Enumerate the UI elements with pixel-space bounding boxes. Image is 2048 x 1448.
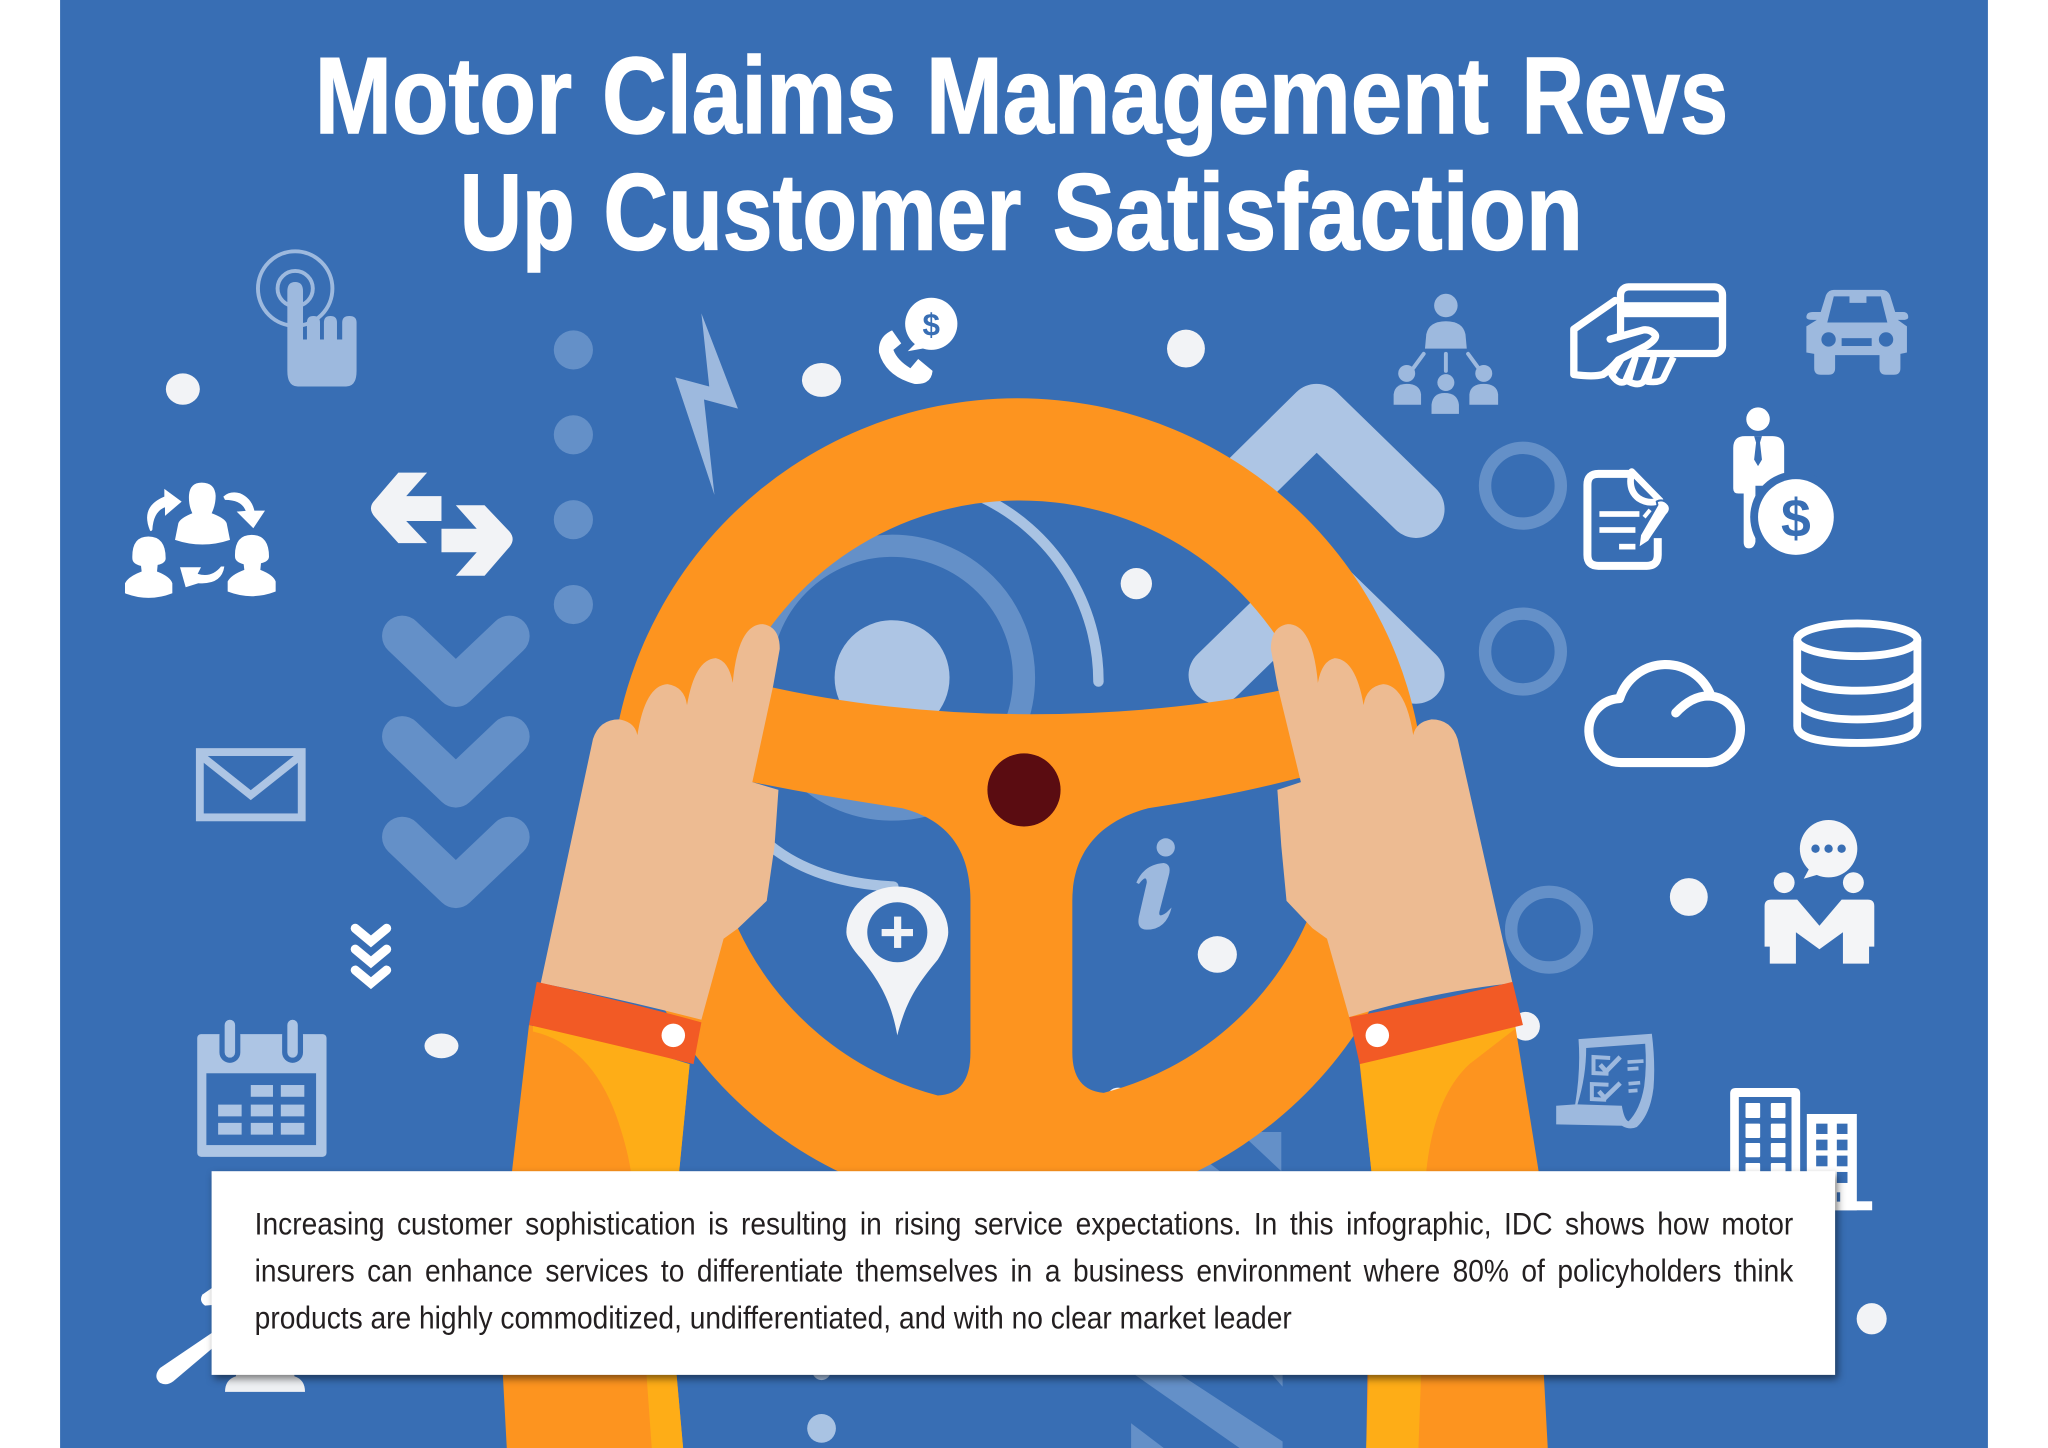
lightning bolt — [675, 313, 738, 495]
intro paragraph: products are highly commoditized, undifferentiated, and with no clear market leader — [255, 1301, 1292, 1336]
icon: envelope — [200, 752, 302, 817]
icon: small triple chevrons — [355, 928, 387, 983]
large up chevrons — [1216, 413, 1416, 675]
icon: gavel — [156, 1285, 305, 1392]
icon: phone with dollar bubble — [879, 298, 957, 384]
intro paragraph: Increasing customer sophistication is resulting in rising service expectations. In this infographic, IDC shows how motor — [255, 1207, 1793, 1242]
icon: businessman with dollar coin — [1733, 407, 1842, 563]
decorative dots, column of faded dots — [554, 330, 593, 624]
title: Claims — [602, 35, 896, 156]
right hand — [1271, 624, 1512, 1017]
intro text box — [212, 1171, 1835, 1375]
thin arc behind the wheel — [771, 497, 1098, 887]
icon: database — [1797, 623, 1917, 743]
large down chevrons — [402, 636, 509, 888]
icon: organisation hierarchy — [1394, 294, 1498, 414]
icon: exchange arrows — [371, 473, 513, 576]
icon: handshake with speech bubble — [1765, 820, 1874, 964]
bottom diagonal stripes — [1131, 1132, 1283, 1448]
intro paragraph — [255, 1207, 1794, 1336]
left wristband — [529, 982, 701, 1064]
icon: cloud — [1589, 665, 1740, 763]
icon: calendar — [197, 1020, 327, 1157]
faded lower dots — [807, 1362, 836, 1443]
icon: phone with dollar bubble: $ — [923, 308, 940, 343]
left hand — [541, 624, 780, 1020]
intro paragraph: insurers can enhance services to differentiate themselves in a business environment where 80% of policyholders think — [255, 1254, 1794, 1289]
icon: touch hand — [258, 251, 357, 386]
title — [315, 35, 1728, 272]
concentric target ring behind the wheel — [760, 546, 1024, 810]
wheel hub — [987, 753, 1061, 826]
faded rings — [1485, 448, 1587, 968]
icon: credit card in hand — [1574, 287, 1722, 384]
icon: people cycle — [125, 483, 276, 598]
steering wheel — [610, 398, 1425, 1213]
icon: office buildings — [1730, 1088, 1872, 1213]
white scattered dots — [166, 330, 1887, 1334]
icon: info i — [1136, 838, 1175, 930]
title: Motor — [315, 35, 572, 156]
title: Revs — [1522, 35, 1728, 156]
icon: checklist scroll — [1556, 1034, 1654, 1128]
right wristband — [1349, 982, 1523, 1064]
left sleeve — [503, 1016, 690, 1448]
title: Satisfaction — [1053, 151, 1583, 272]
icon: car — [1806, 290, 1908, 375]
title: Up — [460, 151, 575, 272]
title: Management — [926, 35, 1489, 156]
icon: map pin — [846, 887, 948, 1035]
right sleeve — [1360, 1016, 1548, 1448]
title: Customer — [603, 151, 1021, 272]
icon: document with pen — [1587, 472, 1670, 566]
icon: businessman with dollar coin: $ — [1781, 490, 1811, 549]
